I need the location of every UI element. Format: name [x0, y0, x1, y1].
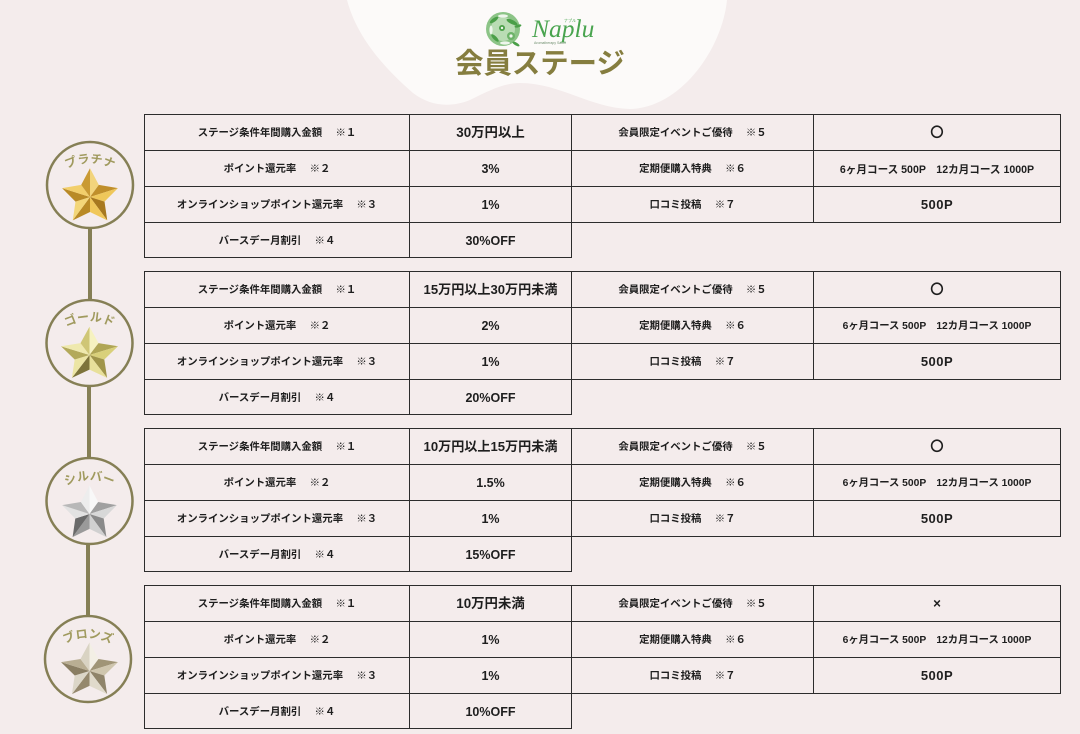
table: platinum conditions: 1%	[481, 198, 500, 212]
panel: gold benefits	[144, 271, 1061, 415]
table: gold perks	[572, 271, 1061, 380]
stage badge: platinum	[46, 140, 134, 230]
table: silver perks: 会員限定イベントご優待 ※５	[618, 442, 767, 453]
table: bronze conditions: ステージ条件年間購入金額 ※１	[198, 599, 356, 610]
stage badge: bronze	[44, 614, 132, 704]
table: silver conditions: オンラインショップポイント還元率 ※３	[177, 514, 377, 525]
stage badge: gold	[45, 298, 134, 388]
table: platinum conditions: ポイント還元率 ※２	[224, 164, 330, 175]
table: silver perks: 〇	[930, 439, 944, 454]
table: silver conditions: バースデー月割引 ※４	[219, 550, 335, 561]
table: silver conditions: 1%	[481, 512, 500, 526]
table: gold perks: 500P	[921, 354, 953, 369]
table: bronze perks: 定期便購入特典 ※６	[639, 635, 746, 646]
table: silver perks	[572, 428, 1061, 537]
table: platinum perks: 〇	[930, 125, 944, 140]
table: platinum conditions: バースデー月割引 ※４	[219, 236, 335, 247]
logo: Aromatherapy Salon	[534, 41, 566, 45]
table: platinum perks: 会員限定イベントご優待 ※５	[618, 128, 767, 139]
title: 会員ステージ	[455, 41, 625, 82]
table: bronze conditions: 10%OFF	[465, 705, 516, 719]
table: gold conditions: オンラインショップポイント還元率 ※３	[177, 357, 377, 368]
table: gold conditions: ステージ条件年間購入金額 ※１	[198, 285, 356, 296]
table: gold conditions: 2%	[481, 319, 500, 333]
table: silver conditions: 1.5%	[476, 476, 505, 490]
table: gold perks: 〇	[930, 282, 944, 297]
header blob	[347, 0, 727, 109]
logo	[486, 12, 594, 46]
table: bronze conditions: 1%	[481, 633, 500, 647]
table: platinum perks: 定期便購入特典 ※６	[639, 164, 746, 175]
table: gold conditions	[144, 271, 572, 415]
table: platinum conditions: 3%	[481, 162, 500, 176]
table: silver conditions: ポイント還元率 ※２	[224, 478, 330, 489]
table: gold perks: 会員限定イベントご優待 ※５	[618, 285, 767, 296]
table: bronze conditions: バースデー月割引 ※４	[219, 707, 335, 718]
table: gold conditions: 15万円以上30万円未満	[424, 282, 557, 297]
table: silver perks: 500P	[921, 511, 953, 526]
timeline connectors	[86, 229, 92, 615]
panel: platinum benefits	[144, 114, 1061, 258]
table: bronze conditions: 10万円未満	[456, 596, 525, 611]
table: bronze conditions: オンラインショップポイント還元率 ※３	[177, 671, 377, 682]
table: bronze conditions: 1%	[481, 669, 500, 683]
table: gold perks: 定期便購入特典 ※６	[639, 321, 746, 332]
table: bronze perks: 会員限定イベントご優待 ※５	[618, 599, 767, 610]
table: gold perks: 6ヶ月コース 500P 12カ月コース 1000P	[843, 321, 1031, 332]
table: silver perks: 口コミ投稿 ※７	[649, 514, 736, 525]
table: gold conditions: 1%	[481, 355, 500, 369]
table: gold conditions: 20%OFF	[465, 391, 516, 405]
stage badge: bronze: ブロンズ	[63, 628, 114, 644]
table: silver perks: 6ヶ月コース 500P 12カ月コース 1000P	[843, 478, 1031, 489]
table: platinum perks	[572, 114, 1061, 223]
table: silver conditions: 15%OFF	[465, 548, 516, 562]
logo: ナプル	[564, 17, 576, 24]
stage badge: silver: シルバー	[65, 470, 114, 486]
table: bronze perks: ×	[933, 596, 941, 611]
table: platinum perks: 500P	[921, 197, 953, 212]
stage badge: silver	[45, 456, 134, 546]
table: bronze conditions	[144, 585, 572, 729]
panel: silver benefits	[144, 428, 1061, 572]
table: platinum perks: 6ヶ月コース 500P 12カ月コース 1000P	[840, 164, 1034, 176]
table: silver perks: 定期便購入特典 ※６	[639, 478, 746, 489]
table: silver conditions: ステージ条件年間購入金額 ※１	[198, 442, 356, 453]
table: gold conditions: バースデー月割引 ※４	[219, 393, 335, 404]
stage badge: gold: ゴールド	[64, 312, 114, 326]
table: silver conditions: 10万円以上15万円未満	[424, 439, 557, 454]
table: silver conditions	[144, 428, 572, 572]
table: platinum perks: 口コミ投稿 ※７	[649, 200, 736, 211]
table: platinum conditions: ステージ条件年間購入金額 ※１	[198, 128, 356, 139]
panel: bronze benefits	[144, 585, 1061, 729]
table: bronze perks: 500P	[921, 668, 953, 683]
table: bronze perks: 6ヶ月コース 500P 12カ月コース 1000P	[843, 635, 1031, 646]
stage badge: platinum: プラチナ	[64, 154, 115, 168]
table: platinum conditions	[144, 114, 572, 258]
table: gold perks: 口コミ投稿 ※７	[649, 357, 736, 368]
table: platinum conditions: オンラインショップポイント還元率 ※３	[177, 200, 377, 211]
table: platinum conditions: 30%OFF	[465, 234, 516, 248]
table: gold conditions: ポイント還元率 ※２	[224, 321, 330, 332]
table: bronze conditions: ポイント還元率 ※２	[224, 635, 330, 646]
table: bronze perks	[572, 585, 1061, 694]
logo: Naplu	[531, 14, 594, 43]
table: bronze perks: 口コミ投稿 ※７	[649, 671, 736, 682]
table: platinum conditions: 30万円以上	[456, 125, 525, 140]
